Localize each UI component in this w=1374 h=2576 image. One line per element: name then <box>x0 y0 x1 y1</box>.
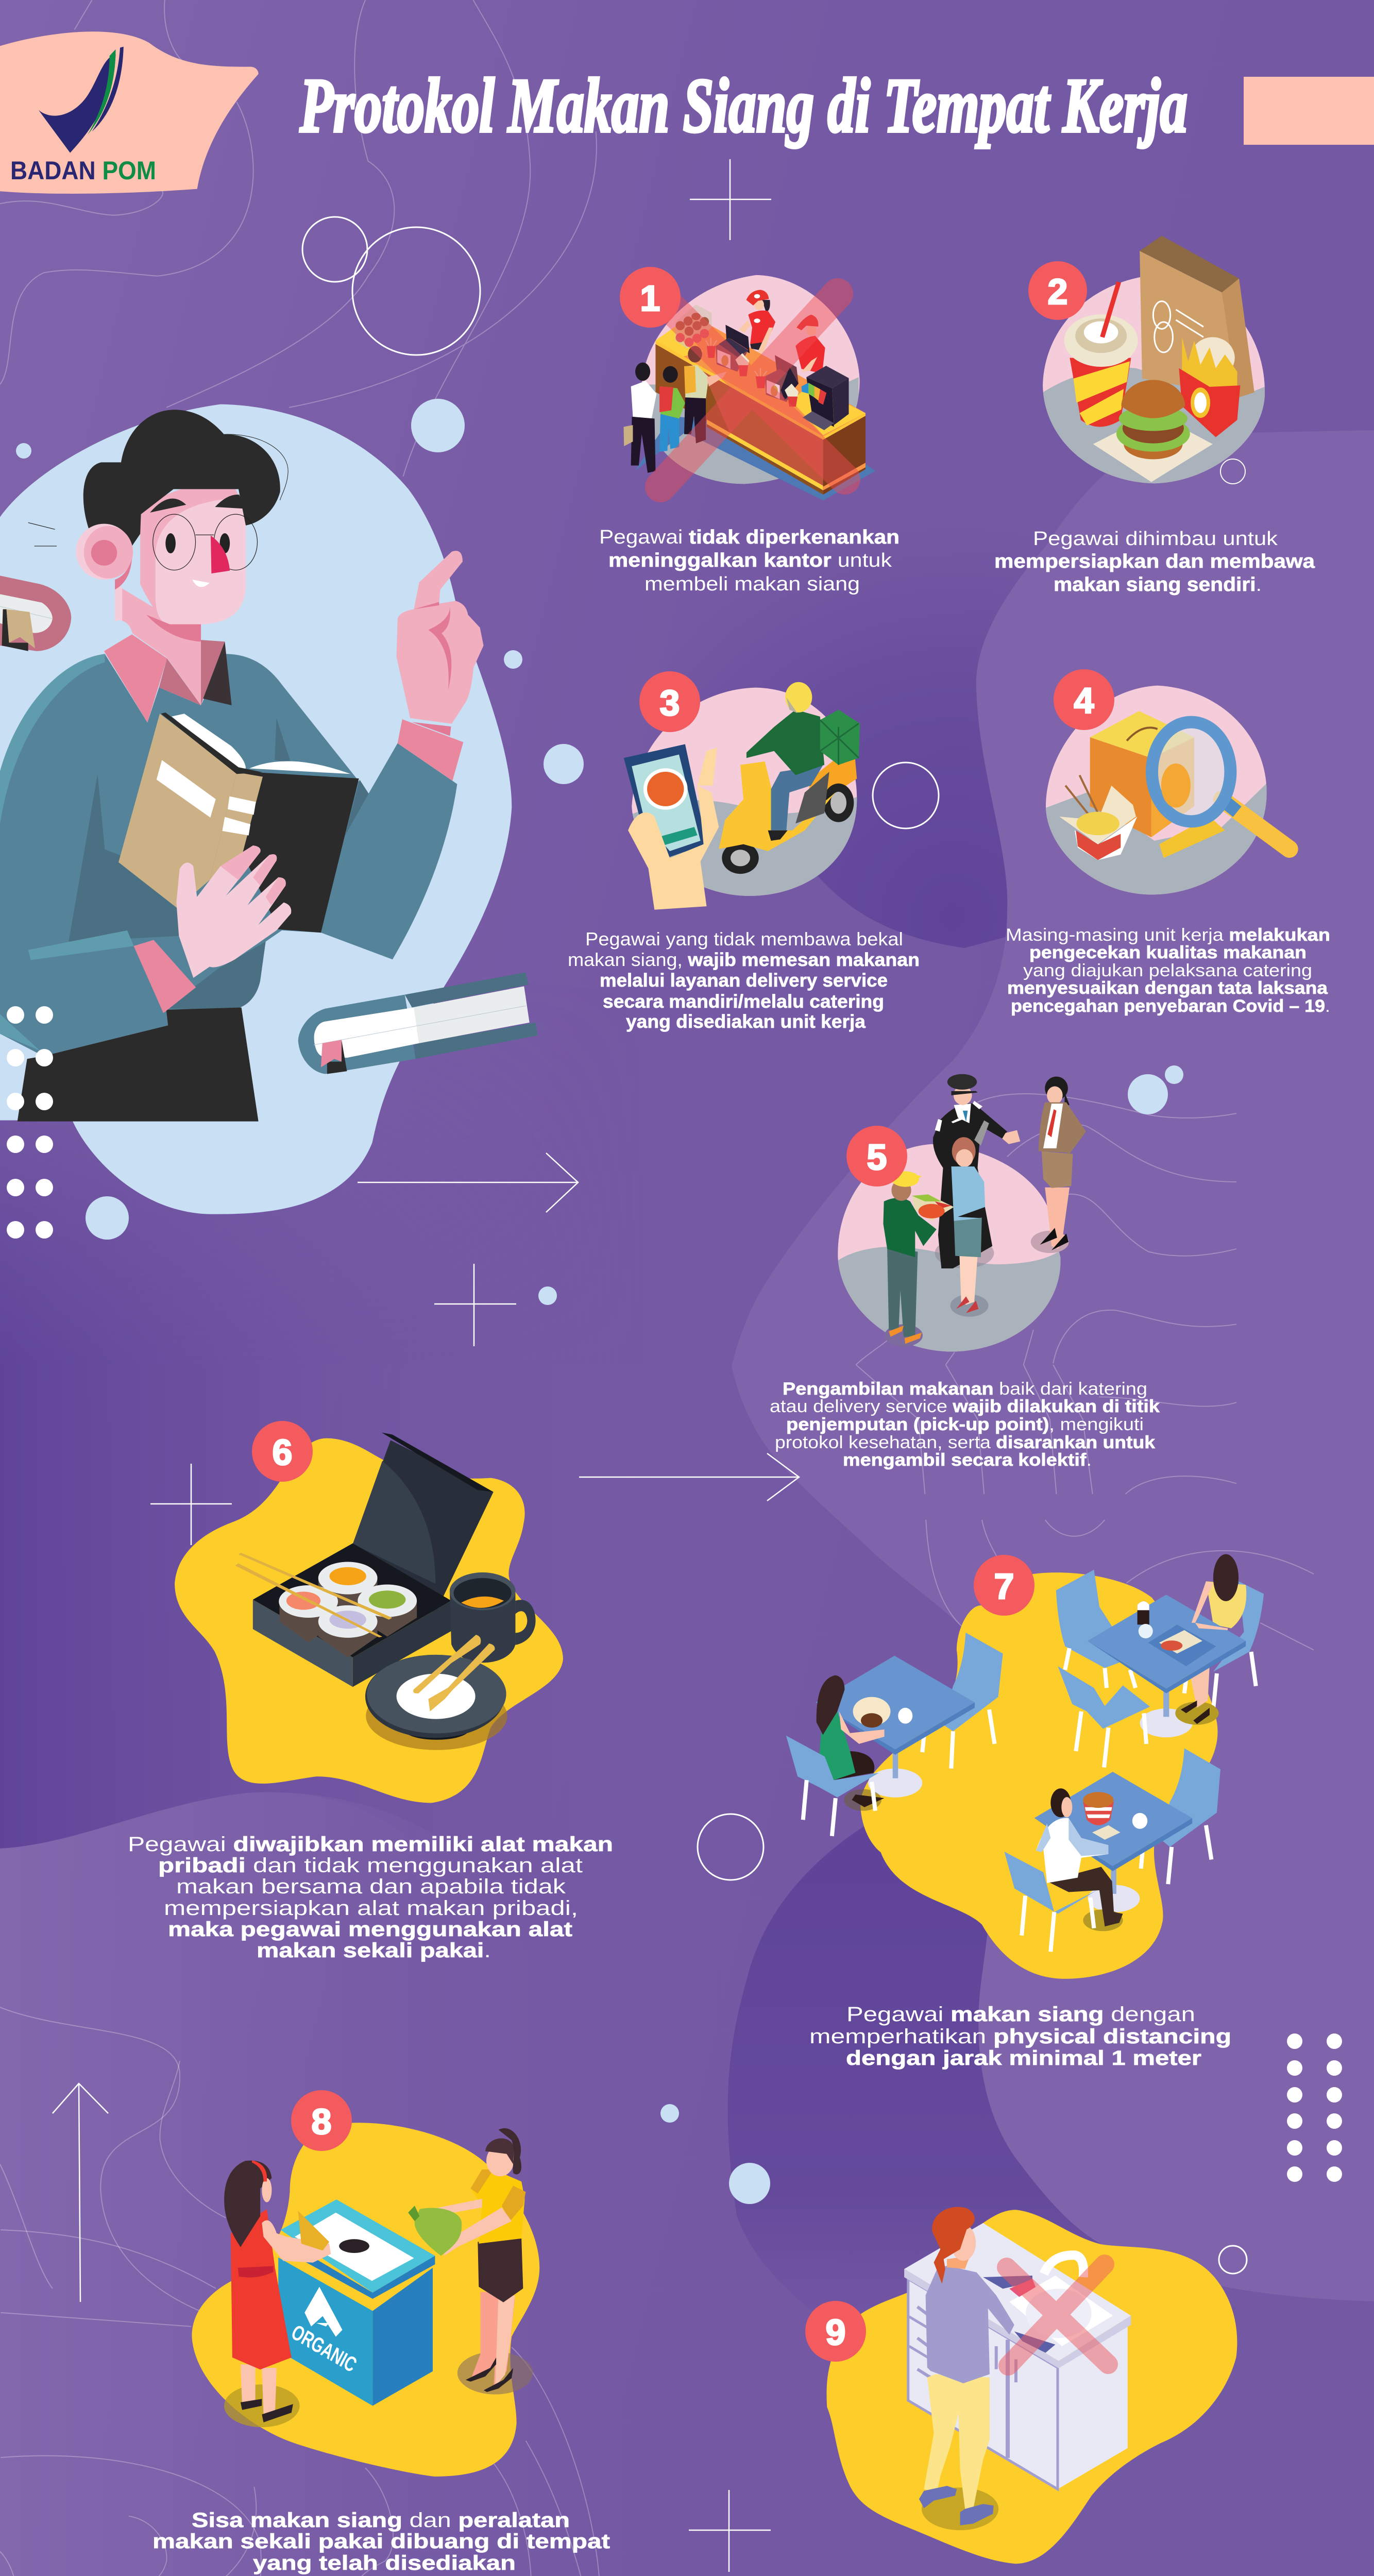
text: step 6: mempersiapkan alat makan pribadi, <box>164 1897 578 1920</box>
logo wordmark: BADAN POM <box>10 156 156 185</box>
paper bag <box>1140 236 1254 398</box>
text: step 7: dengan jarak minimal 1 meter <box>846 2047 1201 2070</box>
panel: step 8 illustration <box>192 2123 539 2477</box>
noodle box <box>1059 775 1137 860</box>
woman in red <box>224 2160 331 2422</box>
panel: step 3 illustration <box>624 682 860 910</box>
text: step 6: pribadi dan tidak menggunakan alat <box>158 1854 583 1877</box>
phone in hand <box>624 744 719 910</box>
seated man <box>1004 1788 1123 1952</box>
number badge 6: 6 <box>273 1432 292 1472</box>
panel: step 1 illustration <box>623 275 875 500</box>
text: step 2 <box>994 528 1315 596</box>
number badge 5 <box>846 1126 907 1187</box>
text: step 4 <box>1006 925 1330 1016</box>
open book <box>118 713 359 933</box>
right table set <box>1056 1554 1264 1737</box>
knife and fork <box>413 1635 495 1711</box>
text: step 1: membeli makan siang <box>644 573 860 595</box>
number badge 3: 3 <box>660 683 680 723</box>
number badge 9 <box>805 2301 866 2362</box>
text: step 1: meninggalkan kantor untuk <box>608 550 892 571</box>
illustration: man with book <box>0 404 538 1214</box>
panel: step 2 illustration <box>1038 236 1268 489</box>
text: step 5: penjemputan (pick-up point) , mengikuti <box>786 1415 1144 1434</box>
panel: step 9 illustration <box>827 2207 1237 2564</box>
guard <box>933 1074 1020 1268</box>
text: step 7 <box>809 2003 1231 2070</box>
number badge 1 <box>620 267 681 328</box>
collar pieces <box>104 634 232 723</box>
number badge 3 <box>639 671 700 732</box>
white dots right <box>1287 2033 1342 2182</box>
text: step 3: melalui layanan delivery service <box>600 970 888 991</box>
text: step 7: Pegawai makan siang dengan <box>846 2003 1195 2026</box>
delivery man <box>883 1171 954 1344</box>
number badge 2: 2 <box>1048 272 1067 312</box>
soda machine <box>802 366 849 430</box>
pizza slice <box>1159 817 1225 858</box>
scooter and rider <box>719 682 860 874</box>
text: step 8 <box>152 2509 610 2574</box>
text: step 6: maka pegawai menggunakan alat <box>168 1918 572 1941</box>
hand holding book <box>176 845 291 978</box>
neck and collar <box>106 584 201 705</box>
text: step 5: atau delivery service wajib dilakukan di titik <box>770 1397 1160 1416</box>
burger <box>1093 380 1213 482</box>
text: step 6 <box>128 1833 613 1962</box>
number badge 1: 1 <box>640 278 660 318</box>
left woman <box>786 1675 885 1836</box>
panel: step 5 illustration <box>835 1074 1086 1355</box>
number badge 2 <box>1028 261 1087 320</box>
sushi rolls <box>279 1562 417 1657</box>
icon: red X over step 1 <box>659 294 845 487</box>
text: step 3: secara mandiri/melalu catering <box>603 991 884 1012</box>
panel: step 7 illustration <box>786 1554 1264 1979</box>
text: step 4: yang diajukan pelaksana catering <box>1023 961 1312 980</box>
staff <box>739 290 825 374</box>
drink cup <box>1064 282 1138 427</box>
bento box <box>253 1433 494 1687</box>
text: step 2: Pegawai dihimbau untuk <box>1033 528 1278 550</box>
arrow: right lower <box>579 1453 799 1501</box>
number badge 6 <box>252 1421 313 1482</box>
text: step 1: Pegawai tidak diperkenankan <box>599 527 900 548</box>
text: step 2: mempersiapkan dan membawa <box>994 551 1315 572</box>
delivery case <box>1090 711 1194 837</box>
text: step 3 <box>568 928 920 1032</box>
plate <box>365 1655 507 1750</box>
customer woman <box>951 1137 985 1313</box>
jacket <box>0 654 457 1056</box>
text: step 1 <box>599 527 900 595</box>
text: step 6: makan sekali pakai . <box>257 1939 491 1962</box>
number badge 8 <box>291 2090 352 2151</box>
organic bin: ORGANIC <box>287 2320 361 2377</box>
icon: logo checkmark <box>39 47 124 153</box>
text: step 3: yang disediakan unit kerja <box>626 1011 866 1032</box>
lower table set <box>1034 1748 1220 1931</box>
icon: red X over step 9 <box>1007 2264 1108 2366</box>
panel: step 4 illustration <box>1041 686 1290 900</box>
magnifier <box>1152 722 1290 849</box>
manager woman <box>1038 1077 1086 1250</box>
counter <box>655 316 866 495</box>
text: step 8: yang telah disediakan <box>253 2552 516 2574</box>
text: step 6: makan bersama dan apabila tidak <box>176 1875 566 1898</box>
text: step 5: mengambil secara kolektif . <box>843 1450 1092 1470</box>
woman in yellow <box>408 2128 525 2392</box>
cuff left <box>134 940 196 1013</box>
registers and cups <box>706 325 799 406</box>
arrow: up <box>53 2083 108 2302</box>
left table set <box>816 1633 1003 1811</box>
text: step 4: Masing-masing unit kerja melakukan <box>1006 925 1330 945</box>
text: step 8: makan sekali pakai dibuang di tempat <box>152 2530 610 2553</box>
white dots left <box>7 1006 53 1239</box>
text: step 5: Pengambilan makanan baik dari katering <box>783 1379 1147 1399</box>
head <box>76 410 288 641</box>
number badge 4 <box>1054 669 1114 730</box>
number badge 7 <box>974 1555 1034 1616</box>
number badge 8: 8 <box>312 2102 331 2142</box>
text: step 6: Pegawai diwajibkan memiliki alat makan <box>128 1833 613 1856</box>
text: step 5: protokol kesehatan, serta disarankan untuk <box>775 1433 1155 1452</box>
front chair at right table <box>1058 1666 1150 1768</box>
woman washing <box>919 2207 1056 2526</box>
text: step 4: menyesuaikan dengan tata laksana <box>1007 978 1328 998</box>
pointing hand <box>397 551 484 781</box>
lower right book <box>298 972 538 1074</box>
text: step 4: pencegahan penyebaran Covid – 19 . <box>1011 996 1330 1016</box>
logo panel <box>0 31 259 194</box>
food rack <box>675 304 712 349</box>
fries <box>1179 337 1240 437</box>
sink cabinet <box>904 2223 1131 2489</box>
arrow: right upper <box>358 1153 578 1212</box>
customers <box>623 346 726 473</box>
organic bin <box>278 2199 435 2406</box>
text: step 8: Sisa makan siang dan peralatan <box>192 2509 570 2532</box>
pants <box>18 1008 259 1122</box>
left book <box>0 575 71 651</box>
text: step 3: makan siang, wajib memesan makanan <box>568 949 920 970</box>
number badge 5: 5 <box>867 1137 887 1177</box>
text: step 2: makan siang sendiri . <box>1054 574 1262 596</box>
panel: step 6 illustration <box>175 1433 563 1803</box>
number badge 7: 7 <box>994 1566 1014 1606</box>
number badge 9: 9 <box>826 2312 845 2352</box>
text: step 5 <box>770 1379 1160 1470</box>
text: step 7: memperhatikan physical distancing <box>809 2025 1231 2048</box>
chopsticks <box>235 1553 392 1637</box>
mug <box>450 1572 536 1663</box>
text: step 4: pengecekan kualitas makanan <box>1029 943 1307 962</box>
number badge 4: 4 <box>1074 681 1094 721</box>
text: step 3: Pegawai yang tidak membawa bekal <box>585 928 903 950</box>
decorative top right panel <box>1244 77 1374 145</box>
